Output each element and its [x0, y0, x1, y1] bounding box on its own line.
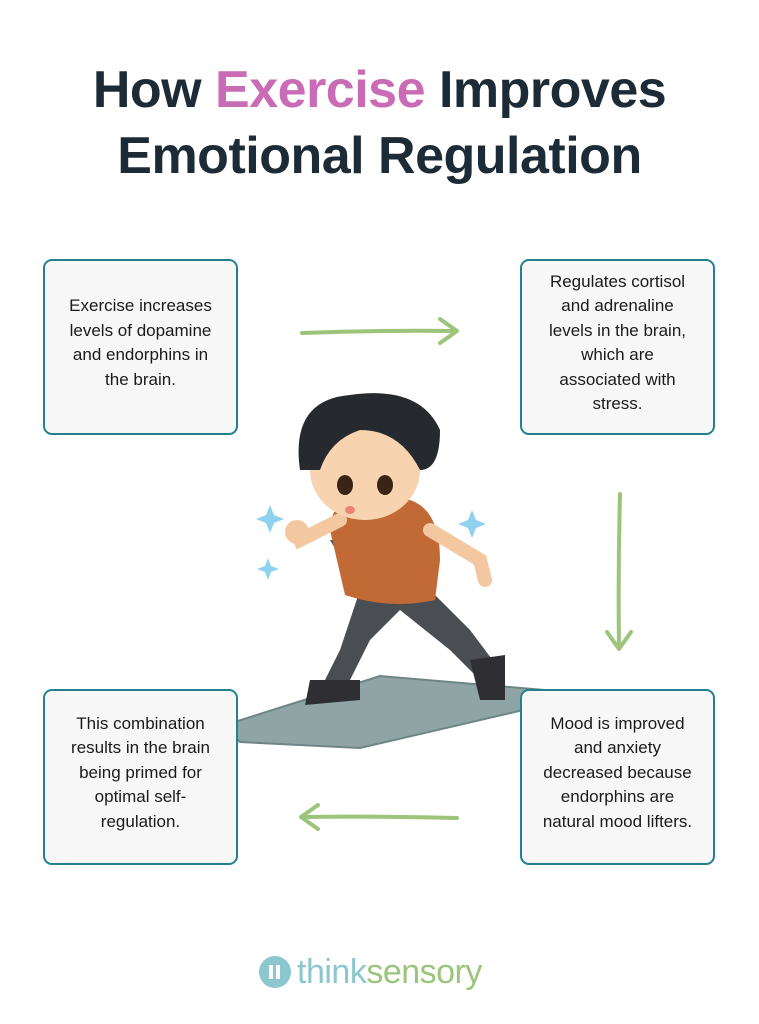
icon: logo circle: [259, 956, 291, 988]
title: [93, 61, 666, 185]
title: How Exercise Improves: [93, 61, 666, 119]
arrow: left: [301, 805, 457, 829]
panel: self-regulation: [43, 689, 238, 865]
panel: cortisol: [520, 259, 715, 435]
logo: think: [297, 952, 366, 990]
panel: mood: Mood is improved and anxiety decreased because endorphins are natural mood lifters.: [543, 714, 692, 831]
panel: mood: [520, 689, 715, 865]
logo: [259, 952, 482, 990]
logo: sensory: [366, 952, 482, 990]
title: Emotional Regulation: [117, 127, 642, 185]
panel: dopamine: [43, 259, 238, 435]
arrow: down: [607, 494, 631, 649]
panel: cortisol: Regulates cortisol and adrenaline levels in the brain, which are associated with stress.: [549, 272, 686, 413]
arrow: top right: [302, 319, 457, 343]
panel: self-regulation: This combination results in the brain being primed for optimal self-regulation.: [71, 714, 210, 831]
illustration: exercising boy on mat: [225, 393, 545, 748]
panel: dopamine: Exercise increases levels of dopamine and endorphins in the brain.: [69, 296, 212, 388]
